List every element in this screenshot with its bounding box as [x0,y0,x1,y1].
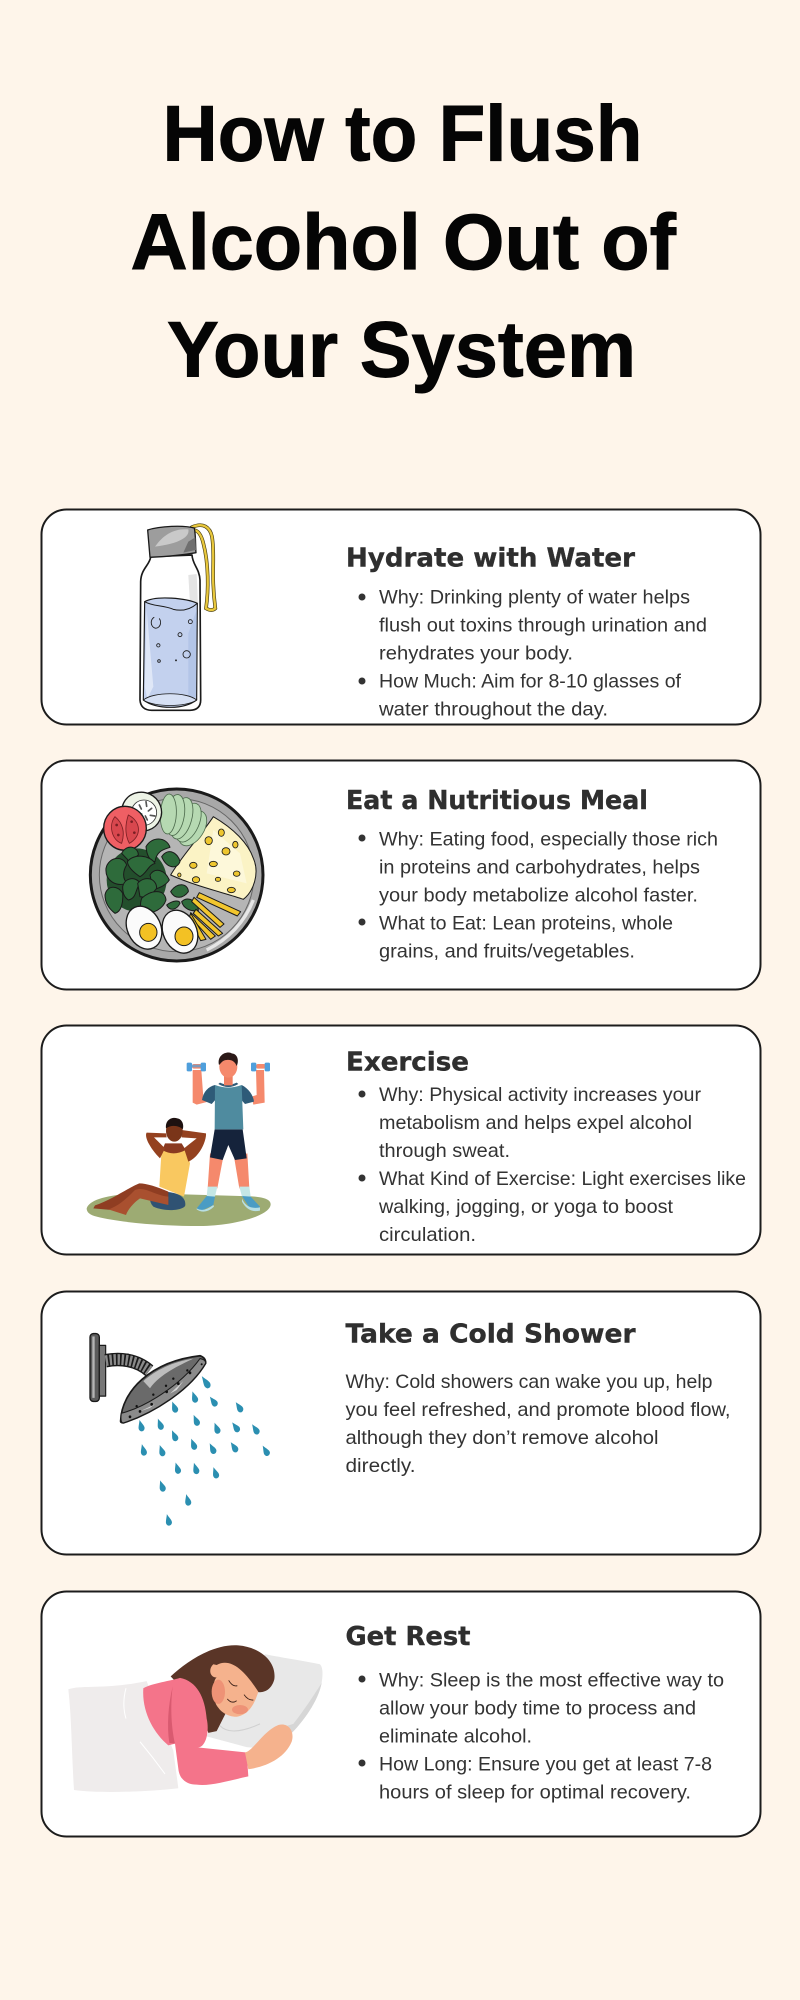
icon: sleeping woman [68,1645,323,1792]
title: How to Flush [162,89,642,178]
icon: food plate [90,786,263,961]
bullet list: rest: Why: Sleep is the most effective way to [379,1670,724,1692]
heading: take a cold shower: Take a Cold Shower [346,1320,636,1350]
bullet list: exercise: metabolism and helps expel alcohol [379,1112,692,1134]
heading: exercise: Exercise [346,1048,469,1078]
bullet list: hydrate [358,586,707,720]
bullet list: hydrate: water throughout the day. [378,698,608,720]
bullet list: meal: in proteins and carbohydrates, helps [379,856,700,878]
bullet list: hydrate: flush out toxins through urination and [379,614,707,636]
bullet list: hydrate: Why: Drinking plenty of water helps [379,586,690,608]
bullet list: exercise: through sweat. [379,1140,510,1162]
bullet list: meal [358,828,718,962]
bullet list: hydrate: How Much: Aim for 8-10 glasses of [379,670,682,692]
bullet list: meal: your body metabolize alcohol faster. [379,884,698,906]
bullet list: rest: eliminate alcohol. [379,1726,532,1748]
bullet list: rest: How Long: Ensure you get at least 7-8 [379,1754,712,1776]
bullet list: rest: allow your body time to process and [379,1698,696,1720]
bullet list: exercise: Why: Physical activity increases your [379,1084,702,1106]
paragraph: shower: directly. [346,1455,416,1477]
bullet list: rest [358,1670,724,1804]
bullet list: meal: Why: Eating food, especially those rich [379,828,718,850]
icon: shower head with drops [90,1334,271,1526]
panel: eat a nutritious meal [42,760,760,990]
paragraph: shower: although they don’t remove alcohol [346,1427,658,1449]
title [130,89,677,394]
panel: exercise [42,1026,760,1254]
heading: hydrate with water: Hydrate with Water [346,544,635,574]
title: Your System [167,305,636,394]
icon: water bottle [140,525,215,710]
bullet list: meal: grains, and fruits/vegetables. [379,940,635,962]
paragraph: shower [346,1371,730,1477]
panel: get rest [42,1592,760,1836]
paragraph: shower: you feel refreshed, and promote blood flow, [346,1399,730,1421]
panel: take a cold shower [42,1292,760,1554]
title: Alcohol Out of [130,197,677,286]
bullet list: exercise: What Kind of Exercise: Light exercises like [379,1168,746,1190]
bullet list: rest: hours of sleep for optimal recovery. [379,1782,691,1804]
bullet list: hydrate: rehydrates your body. [379,642,573,664]
bullet list: exercise: walking, jogging, or yoga to boost [378,1196,674,1218]
bullet list: meal: What to Eat: Lean proteins, whole [379,912,673,934]
panel: hydrate with water [42,510,760,724]
bullet list: exercise [358,1084,746,1246]
bullet list: exercise: circulation. [379,1224,476,1246]
icon: two people exercising [87,1053,271,1226]
heading: eat a nutritious meal: Eat a Nutritious Meal [346,786,648,816]
heading: get rest: Get Rest [346,1622,470,1652]
paragraph: shower: Why: Cold showers can wake you up, help [346,1371,713,1393]
